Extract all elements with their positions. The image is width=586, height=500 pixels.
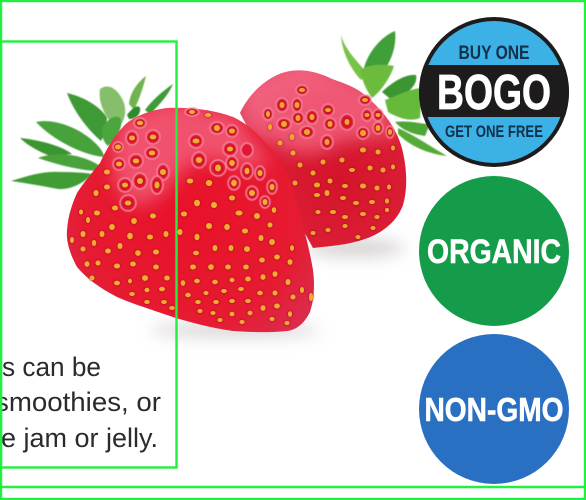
back strawberry pink cells xyxy=(263,85,394,149)
front strawberry highlight xyxy=(113,100,270,205)
badge text: get one free: GET ONE FREE xyxy=(445,123,543,141)
badge: BOGO xyxy=(419,17,569,167)
text block: strawberry uses xyxy=(0,352,161,453)
badge: organic xyxy=(419,176,569,326)
badge text: BOGO: BOGO xyxy=(437,66,551,120)
front strawberry leaves xyxy=(11,76,173,189)
back strawberry highlight xyxy=(235,55,395,153)
back strawberry body xyxy=(240,70,406,248)
front strawberry body xyxy=(67,108,314,332)
text block: strawberry uses: e jam or jelly. xyxy=(1,423,158,453)
front strawberry seeds xyxy=(70,110,313,325)
text block: strawberry uses: s can be xyxy=(2,352,101,382)
badge text: buy one: BUY ONE xyxy=(458,43,530,64)
front strawberry xyxy=(11,76,314,332)
back strawberry leaves xyxy=(341,31,447,156)
badge: non-GMO: NON-GMO xyxy=(424,391,564,428)
badge: non-GMO xyxy=(419,334,569,484)
strawberry shadows xyxy=(150,239,405,337)
back strawberry xyxy=(235,31,447,248)
badge: organic: ORGANIC xyxy=(427,233,561,271)
front strawberry pink cells xyxy=(113,108,277,211)
back strawberry seeds xyxy=(266,88,395,239)
